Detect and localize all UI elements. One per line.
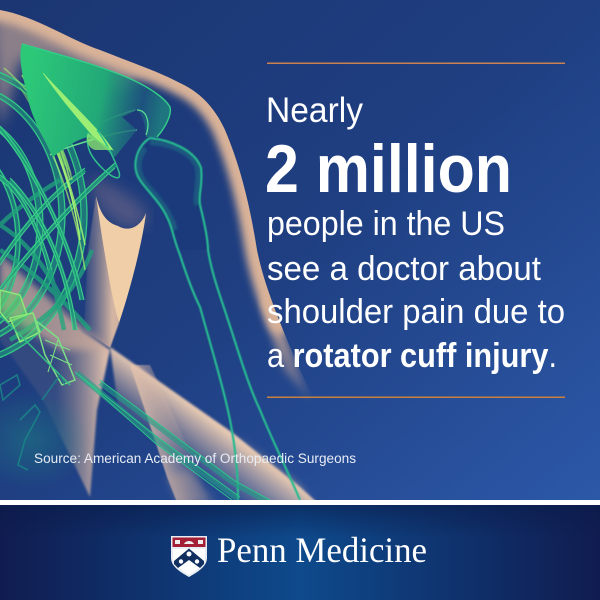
wordmark: Penn Medicine [217, 530, 427, 570]
headline text [265, 91, 565, 375]
lower-left teal haze [0, 402, 80, 478]
white stripe [0, 500, 600, 505]
forearm bands [0, 255, 320, 505]
bright rib highlights [4, 68, 85, 270]
hand bones [0, 290, 75, 385]
clavicle and acromion bone [20, 44, 170, 178]
headline text: see a doctor about [267, 250, 542, 288]
crossing arcs [0, 128, 115, 340]
source note: Source: American Academy of Orthopaedic Surgeons [34, 451, 356, 466]
lower hand bones [0, 375, 65, 470]
headline text: 2 million [265, 131, 512, 207]
scapula lower shading [84, 196, 119, 348]
ribs [0, 65, 137, 365]
headline text: a rotator cuff injury. [267, 337, 557, 375]
shoulder illustration [0, 10, 320, 505]
long forearm strands [75, 372, 270, 502]
scapula blade [96, 196, 146, 323]
humerus bone [135, 138, 300, 500]
headline text: shoulder pain due to [267, 293, 565, 331]
Penn Medicine logo [171, 530, 427, 577]
inner shoulder shading [90, 175, 148, 228]
headline text: Nearly [266, 91, 363, 130]
headline text: people in the US [267, 205, 505, 243]
footer band [0, 505, 600, 600]
top divider [267, 62, 565, 64]
arm silhouette [0, 10, 310, 400]
icon: Penn shield [171, 536, 207, 577]
bottom divider [267, 396, 565, 398]
